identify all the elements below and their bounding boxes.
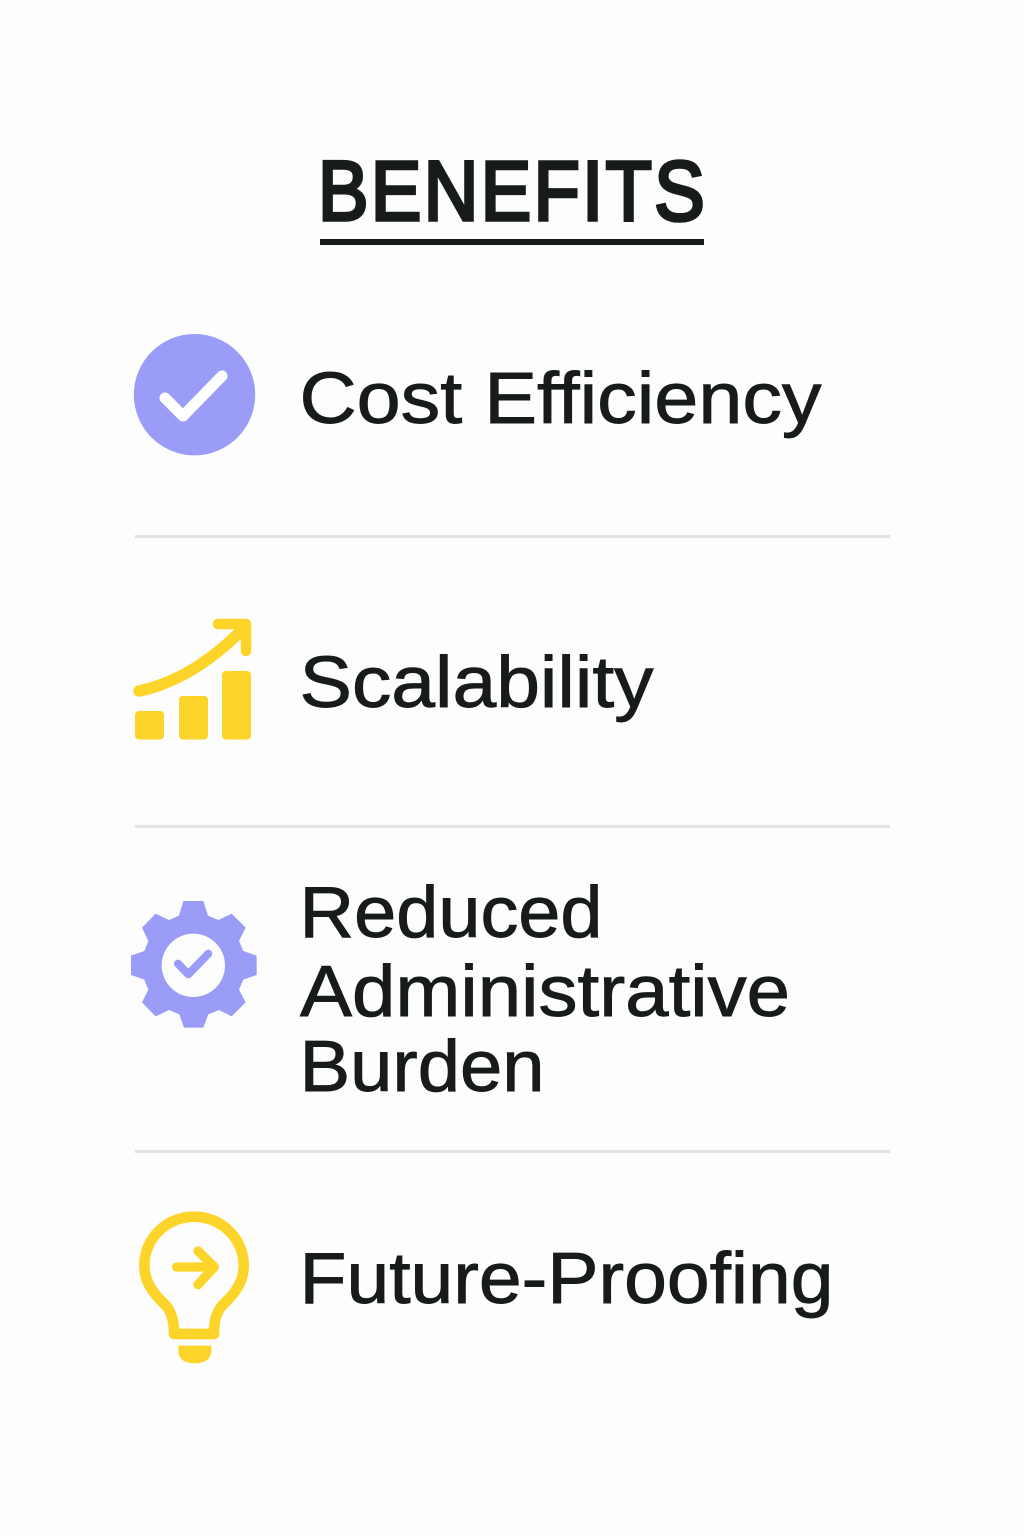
label: Reduced Administrative Burden: Reduced [300,873,602,953]
label: Reduced Administrative Burden [300,873,790,1107]
row: Scalability [135,624,654,740]
label: Cost Efficiency: Cost Efficiency [300,359,822,439]
title: BENEFITS [318,144,707,238]
label: Future-Proofing: Future-Proofing [300,1239,834,1319]
icon: gear with check [131,901,257,1028]
row: Cost Efficiency [134,334,822,455]
label: Reduced Administrative Burden: Administrative [300,952,790,1032]
label: Scalability: Scalability [300,643,654,723]
row: Future-Proofing [144,1217,833,1363]
icon: check circle [134,334,255,455]
icon: growth bars with arrow [135,624,251,740]
label: Reduced Administrative Burden: Burden [300,1027,544,1107]
row: Reduced Administrative Burden [131,873,790,1107]
icon: light bulb with arrow [144,1217,244,1363]
